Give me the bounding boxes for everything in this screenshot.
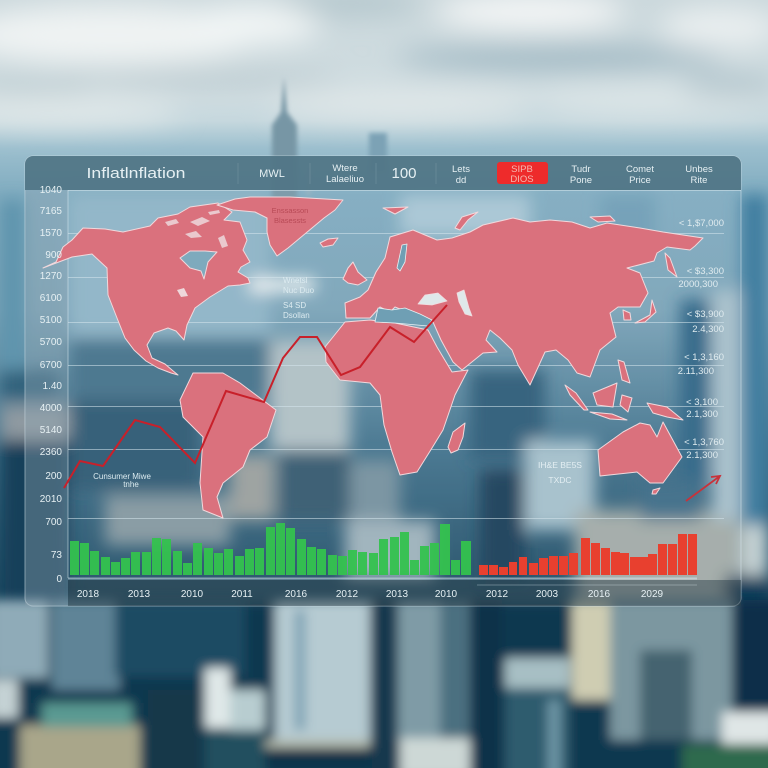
bottom axis years: 2011: [231, 589, 253, 600]
header label: Lets: Lets: [452, 164, 470, 175]
clouds: [0, 0, 768, 126]
left axis values: 7165: [40, 206, 62, 217]
Iceland: [320, 238, 338, 247]
North America: [43, 203, 250, 375]
header label: Where: Wtere: [332, 163, 358, 174]
annotation: Greenland label: Enssasson: [272, 206, 308, 215]
header label: Tudr: Tudr: [571, 164, 591, 175]
left axis values: 1.40: [43, 381, 62, 392]
left axis values: 6700: [40, 360, 62, 371]
annotation: Atlantic label: S4 SD: [283, 301, 306, 310]
glass dashboard panel: [25, 156, 741, 606]
South-East Asia islands: [565, 360, 683, 420]
left axis values: 700: [45, 517, 62, 528]
header label: Comet price: [626, 164, 654, 186]
bottom axis years: 2013: [386, 589, 409, 600]
Tasmania: [652, 488, 660, 494]
left axis values: 900: [45, 250, 62, 261]
right axis values: < 3,100: [686, 397, 718, 408]
header label: Where: Lalaeliuo: [326, 174, 364, 185]
left axis values: 4000: [40, 403, 62, 414]
Madagascar: [448, 423, 465, 453]
left axis values: 0: [56, 574, 62, 585]
header label: Unbes: Rite: [691, 175, 707, 186]
right axis values: 2.1,300: [686, 409, 718, 420]
bottom axis years: 2029: [641, 589, 664, 600]
annotation: Indian Ocean label: TXDC: [548, 475, 572, 485]
Eurasia: [345, 218, 703, 385]
header value: 100: 100: [391, 165, 417, 182]
left axis values: 1570: [40, 228, 62, 239]
bottom axis years: 2012: [486, 589, 509, 600]
right axis values: 2.11,300: [678, 366, 714, 377]
red highlighted header button: DIOS: [510, 174, 534, 185]
red arrow: [686, 476, 720, 501]
Arctic archipelago ice detail: [165, 210, 228, 248]
header label: Lets: [452, 164, 470, 186]
annotation: Greenland label: [272, 206, 308, 225]
left axis values: 6100: [40, 293, 62, 304]
bottom axis years: 2010: [181, 589, 204, 600]
red highlighted header button: SIPB: [511, 164, 533, 175]
Hudson Bay: [180, 251, 217, 279]
Greenland: [217, 197, 343, 256]
bottom axis years: 2003: [536, 589, 559, 600]
right axis values: 2000,300: [678, 279, 718, 290]
bottom axis years: [77, 589, 664, 600]
Japan, Korea and Sakhalin: [623, 253, 677, 323]
annotation: Atlantic label: Nuc Duo: [283, 286, 315, 295]
annotation: Indian Ocean label: IH&E BE5S: [538, 460, 582, 470]
annotation: Indian Ocean label: [538, 460, 582, 485]
world map: [43, 197, 703, 518]
left axis values: 1270: [40, 271, 62, 282]
annotation: consumer price: tnhe: [123, 480, 139, 489]
left axis values: 2360: [40, 447, 62, 458]
right axis values: 2.1,300: [686, 450, 718, 461]
annotation: Atlantic label: Dsollan: [283, 311, 310, 320]
bars: red series: [479, 534, 697, 575]
left axis values: 200: [45, 471, 62, 482]
title: Inflatlnflation: [86, 165, 186, 182]
header bar labels: [86, 162, 713, 186]
annotation: consumer price: Cunsumer Miwe: [93, 472, 151, 481]
bottom axis years: 2016: [285, 589, 308, 600]
red inflation trend line: [64, 305, 447, 488]
bottom axis years: 2016: [588, 589, 611, 600]
mid city inside panel: [0, 195, 768, 610]
Black Sea and Caspian Sea: [418, 290, 472, 316]
annotation: consumer price: [93, 472, 151, 489]
Great Lakes: [177, 288, 188, 297]
left axis values: 2010: [40, 494, 62, 505]
red highlighted header button: [497, 162, 548, 185]
right axis values: 2.4,300: [692, 324, 724, 335]
bottom axis years: 2018: [77, 589, 100, 600]
annotation: Atlantic label: Wnetsl: [283, 276, 308, 285]
bottom axis years: 2012: [336, 589, 359, 600]
header label: Lets: dd: [456, 175, 466, 186]
header label: Where: [326, 163, 364, 185]
right axis values: < 1,3,160: [684, 352, 724, 363]
Australia: [598, 422, 682, 483]
header label: Comet price: Comet: [626, 164, 654, 175]
left axis values: 73: [51, 550, 62, 561]
bottom axis years: 2013: [128, 589, 151, 600]
bottom axis years: 2010: [435, 589, 458, 600]
right axis values: < 1,3,760: [684, 437, 724, 448]
Mediterranean and Baltic seas: [375, 244, 432, 326]
header label: Tudr: [570, 164, 592, 186]
United Kingdom: [343, 262, 367, 285]
bars: green series: [70, 523, 471, 575]
right axis values: < $3,300: [687, 266, 724, 277]
chart grid lines: [68, 190, 741, 585]
left axis values: 1040: [40, 185, 62, 196]
Africa: [325, 320, 468, 475]
left axis values: 5100: [40, 315, 62, 326]
left axis values: 5140: [40, 425, 62, 436]
Arctic Russia islands: [383, 207, 615, 230]
right axis values: [678, 218, 724, 461]
annotation: Greenland label: Blasessts: [274, 216, 306, 225]
South America: [180, 373, 276, 518]
right axis values: < $3,900: [687, 309, 724, 320]
distant tower: [272, 77, 387, 200]
right axis values: < 1,$7,000: [679, 218, 724, 229]
header label: Unbes: Unbes: [685, 164, 713, 175]
left axis values: 5700: [40, 337, 62, 348]
header label: Comet price: Price: [629, 175, 651, 186]
bottom buildings: [0, 600, 768, 768]
annotation: Atlantic label: [283, 276, 315, 320]
left axis values: [40, 185, 62, 585]
header label: MWL: MWL: [259, 168, 285, 180]
header label: Tudr: Pone: [570, 175, 592, 186]
header label: Unbes: [685, 164, 713, 186]
